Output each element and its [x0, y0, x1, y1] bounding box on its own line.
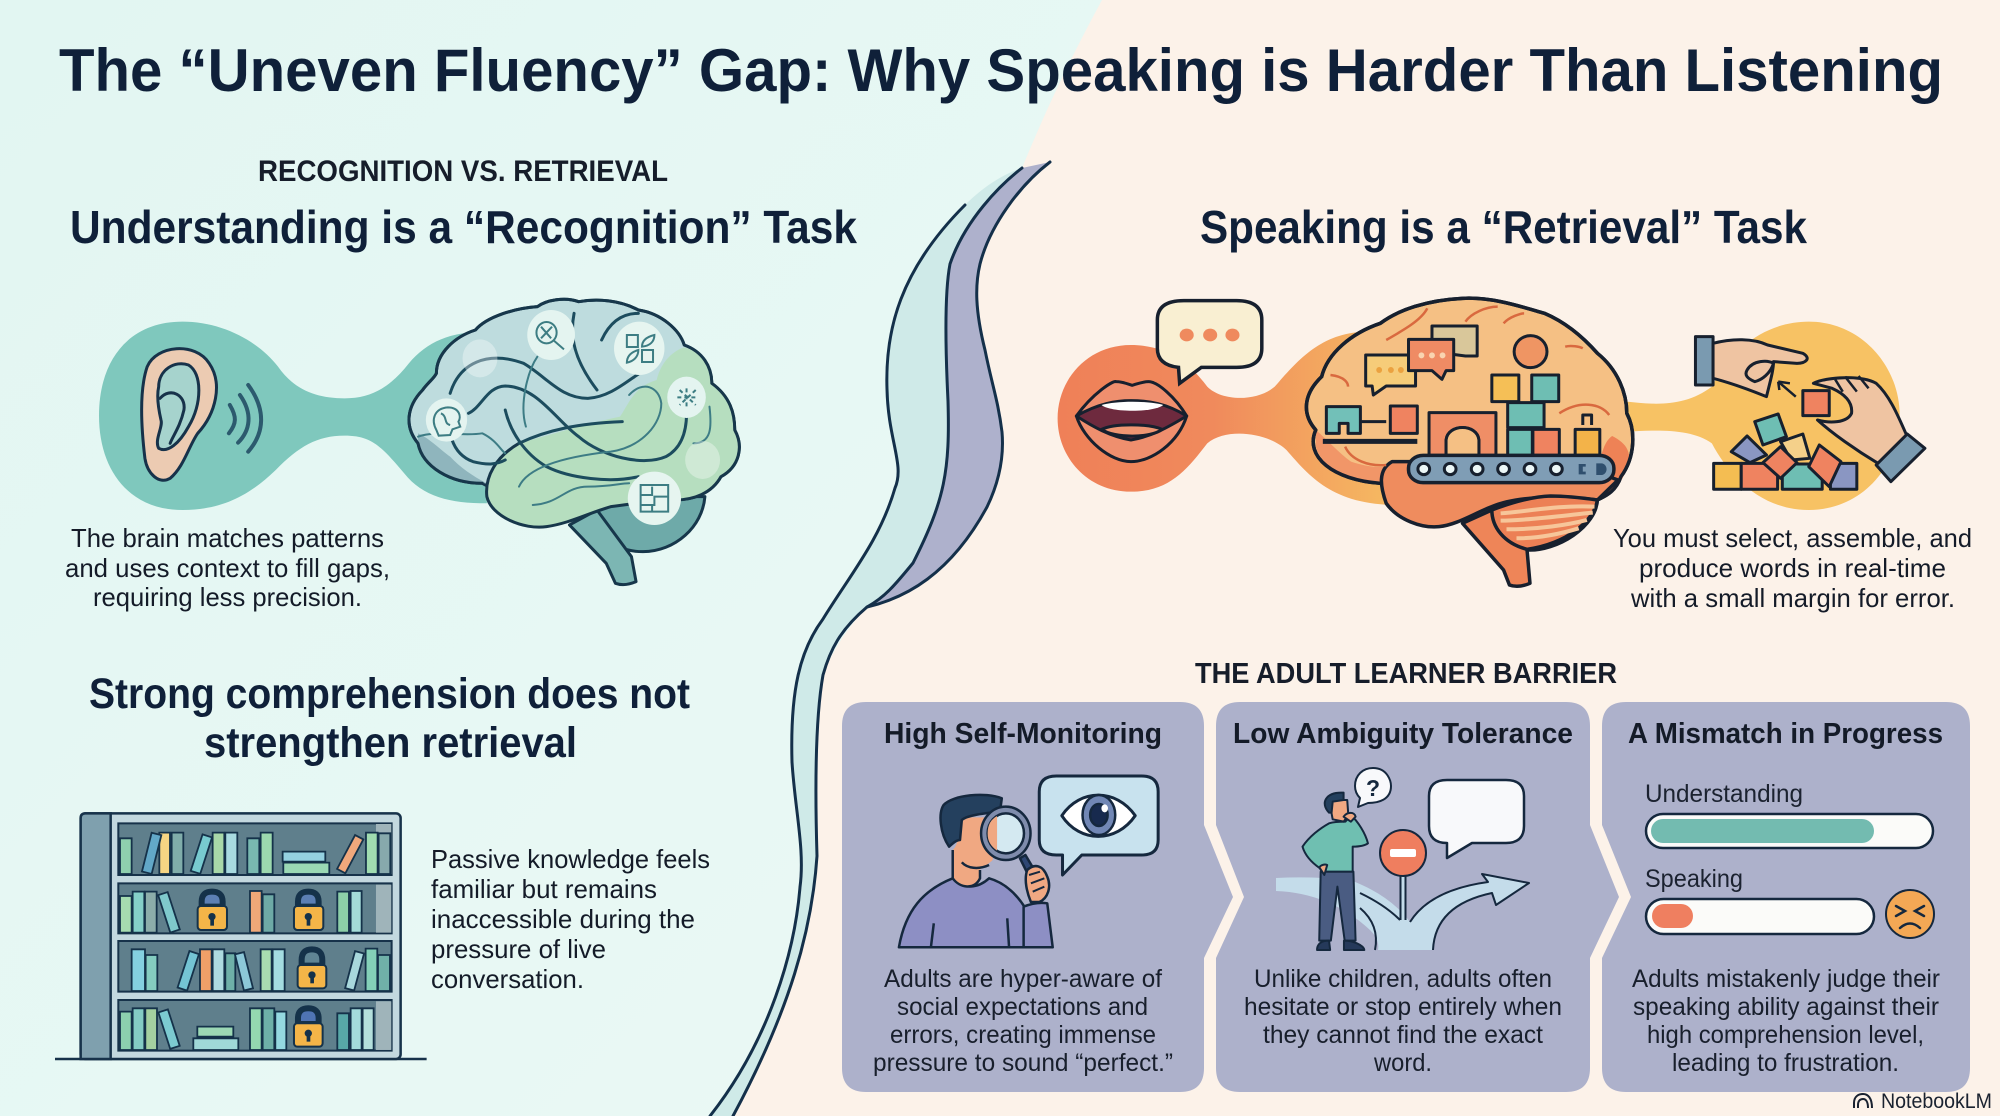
shelf 3 books	[132, 949, 145, 991]
panel: low ambiguity tolerance	[1216, 702, 1619, 1092]
icon: frustrated face	[1886, 890, 1934, 938]
notebooklm watermark: NotebookLM	[1881, 1090, 1992, 1113]
text: retrieval explanation: You must select, assemble, and	[1613, 523, 1972, 553]
shelf 2 books	[120, 896, 132, 933]
body text	[873, 965, 1173, 1077]
heading: A Mismatch in Progress	[1628, 718, 1943, 750]
icon: ear	[142, 349, 261, 480]
body text: errors, creating immense	[890, 1021, 1156, 1049]
icon: hands with blocks	[1695, 337, 1925, 489]
heading: strong comprehension: Strong comprehension does not	[89, 670, 690, 718]
icon: bookshelf with locks	[55, 813, 427, 1059]
body text: social expectations and	[897, 993, 1148, 1021]
body text: Adults are hyper-aware of	[884, 965, 1162, 993]
icon: hesitating person at a fork with stop sign	[1276, 768, 1529, 950]
body text: hesitate or stop entirely when	[1244, 993, 1562, 1021]
shelf 4 books	[120, 1012, 132, 1050]
icon: retrieval brain	[1306, 298, 1633, 586]
body text: pressure to sound “perfect.”	[873, 1049, 1173, 1077]
padlocks	[198, 892, 326, 1047]
progress bar: speaking: Speaking	[1645, 865, 1743, 893]
question mark: ?	[1366, 775, 1380, 801]
text: passive knowledge	[431, 844, 710, 994]
text: retrieval explanation: produce words in real-time	[1639, 553, 1946, 583]
section label: recognition vs retrieval: RECOGNITION VS. RETRIEVAL	[258, 155, 668, 188]
text: passive knowledge: pressure of live	[431, 934, 606, 964]
progress bar: speaking	[1645, 865, 1874, 934]
heading: strong comprehension	[89, 670, 690, 767]
text: recognition explanation	[65, 523, 390, 612]
body text: leading to frustration.	[1672, 1049, 1899, 1077]
text: passive knowledge: familiar but remains	[431, 874, 657, 904]
heading: High Self-Monitoring	[884, 718, 1162, 750]
body text: Unlike children, adults often	[1254, 965, 1552, 993]
icon: mouth	[1076, 382, 1187, 462]
heading: retrieval task: Speaking is a “Retrieval” Task	[1200, 201, 1807, 253]
shelf 1 books	[120, 838, 132, 874]
ear to brain flow: recognition illustration	[99, 299, 739, 585]
text: passive knowledge: Passive knowledge feels	[431, 844, 710, 874]
icon: person with magnifier and eye bubble	[899, 776, 1158, 947]
body text: high comprehension level,	[1647, 1021, 1924, 1049]
body text	[1632, 965, 1940, 1077]
text: recognition explanation: and uses context to fill gaps,	[65, 553, 390, 583]
title: The “Uneven Fluency” Gap: Why Speaking is Harder Than Listening	[59, 37, 1943, 104]
text: retrieval explanation	[1613, 523, 1972, 613]
conveyor belt	[1409, 455, 1614, 483]
body text: Adults mistakenly judge their	[1632, 965, 1940, 993]
heading: Low Ambiguity Tolerance	[1233, 718, 1573, 750]
text: passive knowledge: inaccessible during the	[431, 904, 695, 934]
blocks	[1492, 375, 1519, 402]
faint highlight circles	[463, 339, 720, 479]
icon: recognition brain	[409, 299, 739, 585]
heading: recognition task: Understanding is a “Recognition” Task	[70, 201, 857, 253]
section label: the adult learner barrier: THE ADULT LEARNER BARRIER	[1195, 658, 1617, 690]
figure drawn from zoomed coordinates	[1302, 793, 1368, 950]
body text: word.	[1373, 1049, 1432, 1077]
panel: high self-monitoring	[842, 702, 1233, 1092]
central wave divider	[710, 162, 1050, 1116]
text: retrieval explanation: with a small margin for error.	[1630, 583, 1955, 613]
heading: strong comprehension: strengthen retrieval	[204, 719, 577, 767]
icon: speech bubble with dots	[1157, 301, 1262, 383]
body text: they cannot find the exact	[1263, 1021, 1543, 1049]
progress bar: understanding	[1645, 780, 1933, 848]
text: passive knowledge: conversation.	[431, 964, 584, 994]
text: recognition explanation: requiring less precision.	[93, 582, 362, 612]
teal connector blob	[99, 322, 487, 510]
connector blobs	[1058, 332, 1404, 505]
text: recognition explanation: The brain matches patterns	[71, 523, 384, 553]
bubbles in brain	[1432, 326, 1477, 356]
panel: a mismatch in progress	[1602, 702, 1970, 1092]
progress bar: understanding: Understanding	[1645, 780, 1803, 808]
icon badges in brain	[426, 310, 706, 525]
body text: speaking ability against their	[1633, 993, 1939, 1021]
body text	[1244, 965, 1562, 1077]
mouth to brain to hands flow: retrieval illustration	[1058, 298, 1925, 586]
